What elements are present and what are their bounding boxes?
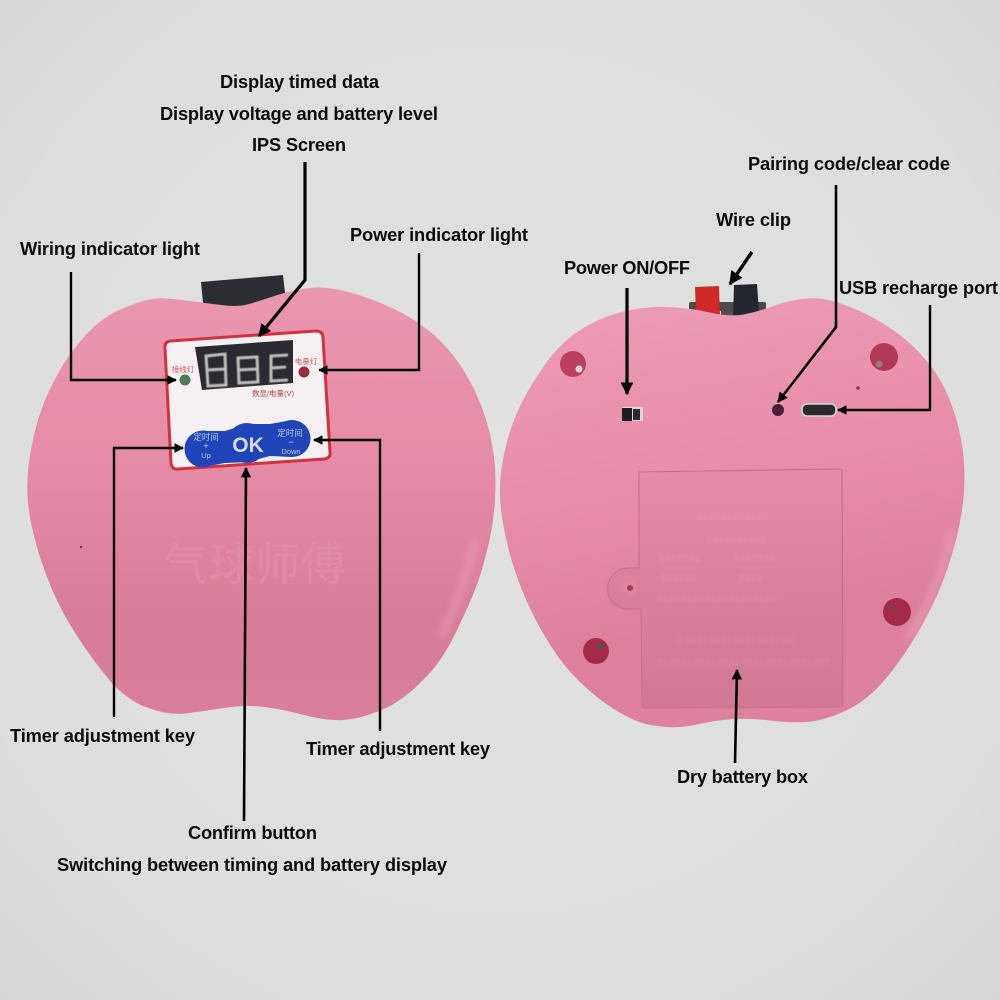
screw hole top left: [560, 351, 586, 377]
arrow: power switch: [625, 288, 629, 394]
button text: plus: +: [203, 441, 209, 451]
device: front view: [27, 275, 496, 720]
label: power indicator: Power indicator light: [350, 224, 528, 245]
button text: up: 定时间: [193, 432, 219, 442]
battery cover: [608, 469, 843, 708]
embossed logo: 气球师傅: [163, 539, 347, 590]
label: timer key right: Timer adjustment key: [306, 738, 491, 759]
label: switching: Switching between timing and battery display: [57, 854, 448, 875]
power switch: [622, 407, 643, 421]
apple body back: [500, 298, 964, 727]
wiring indicator LED: [180, 374, 190, 386]
button text: minus: −: [288, 437, 294, 447]
label: timer key left: Timer adjustment key: [10, 725, 196, 746]
label: display timed data: Display timed data: [220, 71, 380, 92]
power light label: 电量灯: [295, 356, 318, 366]
device: back view: [500, 284, 964, 727]
USB port: [802, 404, 836, 416]
label: wiring indicator: Wiring indicator light: [20, 238, 200, 259]
arrow: battery: [735, 670, 737, 763]
arrow: confirm: [244, 468, 246, 821]
black rear tab: [201, 275, 285, 308]
button text: OK: OK: [232, 434, 264, 457]
wire clip terminals: [689, 284, 766, 320]
wiring light label: 接线灯: [172, 364, 195, 374]
screw hole bottom left: [583, 638, 609, 664]
power indicator LED: [298, 366, 310, 378]
edge highlight: [908, 530, 953, 640]
label: battery box: Dry battery box: [677, 766, 809, 787]
screw hole right: [883, 598, 911, 626]
screen caption: 数显/电量(V): [252, 388, 295, 398]
apple body front: [27, 288, 496, 720]
arrow: timer left: [114, 448, 183, 717]
label: power on/off: Power ON/OFF: [564, 257, 690, 278]
arrow: power light: [319, 253, 419, 370]
control panel: [165, 331, 330, 469]
screw hole top right: [870, 343, 898, 371]
button text: Up: Up: [201, 451, 211, 460]
arrow: wiring light: [71, 272, 176, 380]
edge highlight: [441, 540, 475, 636]
button text: down: 定时间: [277, 428, 303, 438]
blue button strip: [184, 420, 310, 468]
speck: [80, 546, 82, 548]
arrow: wire clip: [730, 252, 752, 284]
label: confirm button: Confirm button: [188, 822, 317, 843]
label: IPS screen: IPS Screen: [252, 134, 346, 155]
label: pairing code: Pairing code/clear code: [748, 153, 950, 174]
label: display voltage: Display voltage and battery level: [160, 103, 438, 124]
arrow: pairing: [778, 185, 836, 402]
pinhole: [856, 386, 860, 390]
arrow: IPS screen: [259, 162, 305, 336]
arrow: USB: [838, 305, 930, 410]
pairing button: [772, 404, 784, 416]
embossed cover markings: [658, 518, 830, 662]
arrow: timer right: [314, 440, 380, 731]
button text: Down: Down: [281, 447, 301, 456]
label: wire clip: Wire clip: [716, 209, 791, 230]
panel plate: [165, 331, 330, 469]
seven-segment digits: [206, 354, 288, 386]
display screen: [195, 340, 293, 390]
label: USB port: USB recharge port: [839, 277, 998, 298]
